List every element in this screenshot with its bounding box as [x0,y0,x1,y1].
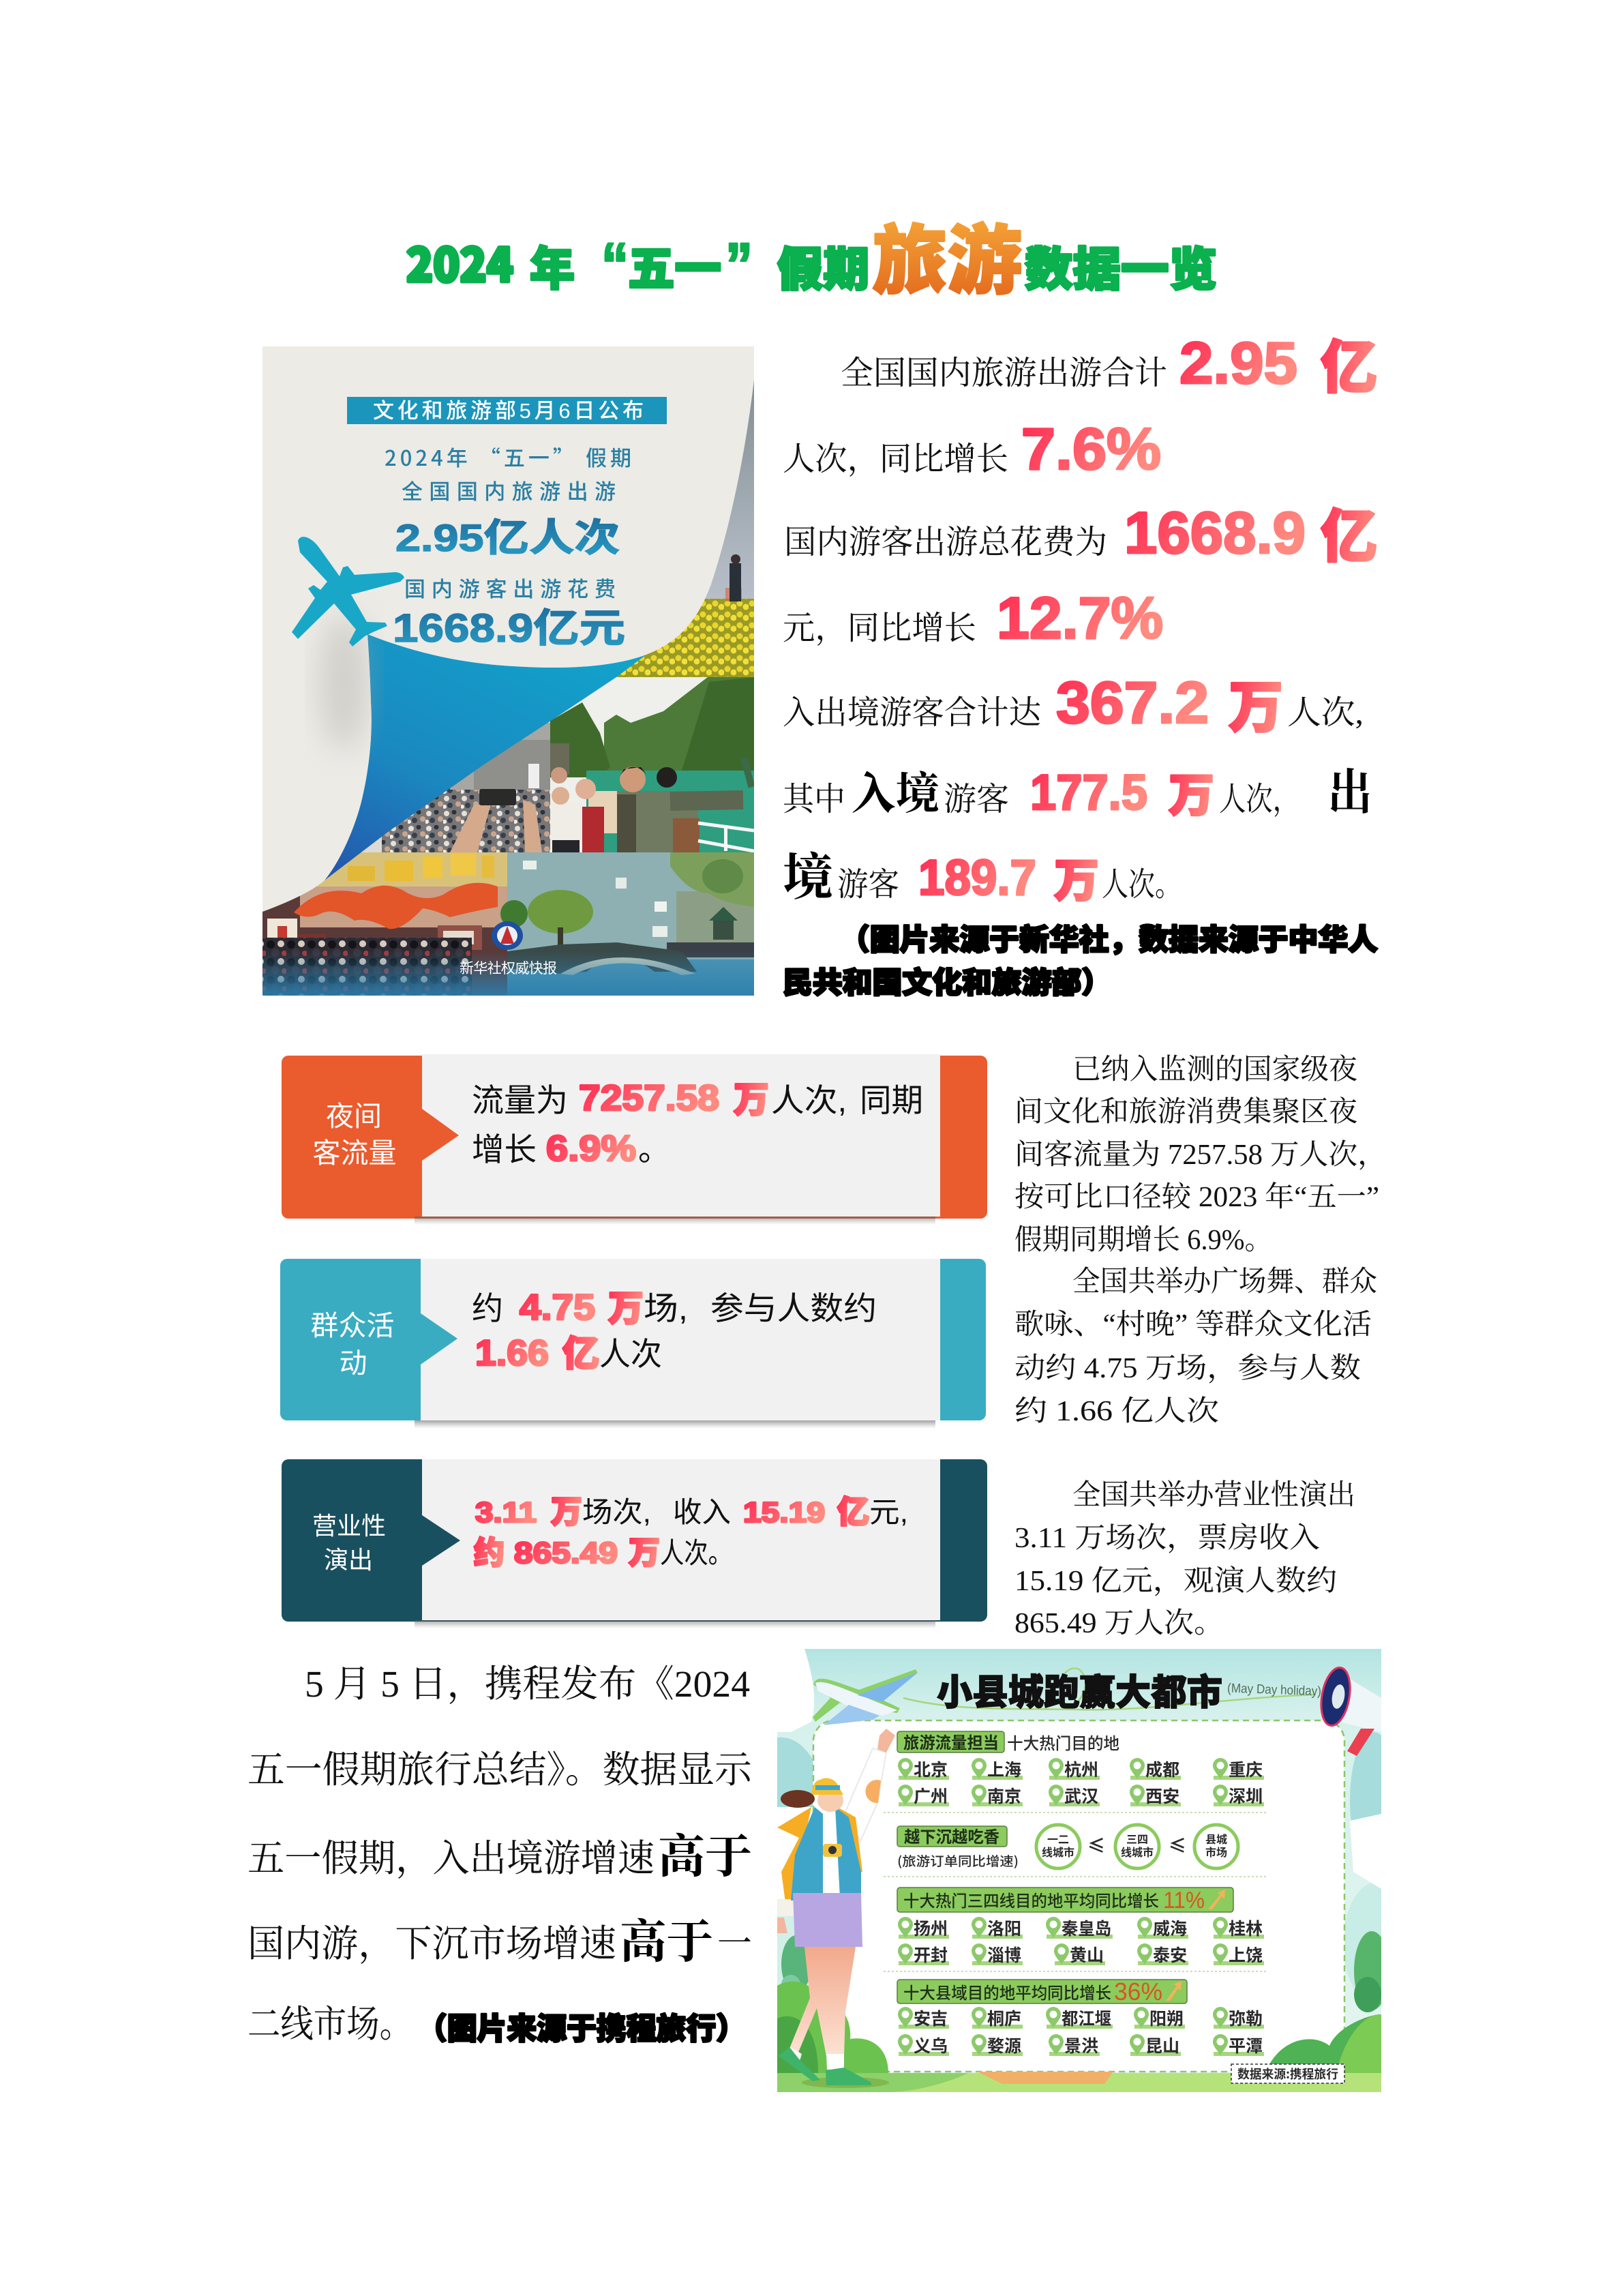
source note: Xinhua and ministry [783,916,1378,1002]
text block: national tourism figures: 1668.9 [1124,501,1306,566]
text block: night consumption note: 间客流量为 7257.58 万人次， [1014,1139,1387,1171]
card: commercial performances: 15.19 [743,1496,825,1528]
list: tier 3-4 cities: 威海 [1153,1915,1187,1940]
text block: mass events note: 动约 4.75 万场，参与人数 [1014,1353,1361,1384]
list: tier 3-4 cities: 开封 [914,1942,948,1967]
poster headline: 国内游客出游花费 [404,572,616,603]
comparison circles: 县城 [1205,1830,1227,1847]
poster headline: 1668.9亿元 [393,606,625,651]
icon: megaphone [1317,1665,1381,1756]
poster headline [385,441,631,651]
comparison circles: 线城市 [1121,1843,1154,1860]
text block: national tourism figures: 人次， [1219,781,1299,818]
card: commercial performances [282,1459,987,1628]
poster headline: 全国国内旅游出游 [402,475,616,505]
card: mass cultural events: 人次 [599,1336,662,1372]
ribbon swoosh [903,1669,1316,1710]
card: night visitor flow: 夜间 [326,1101,382,1132]
side blobs [777,1732,1411,2012]
comparison circles: 三四 [1126,1830,1148,1847]
list: ten hot cities: 重庆 [1229,1757,1263,1781]
text block: national tourism figures: 出 [1327,766,1372,820]
card: commercial performances: 场次, [582,1496,651,1528]
text block: national tourism figures: 游客 [837,867,899,903]
list: ten hot cities: 北京 [914,1757,948,1781]
text block: night consumption note: 已纳入监测的国家级夜 [1072,1054,1357,1086]
title: “ [601,231,629,299]
list: county cities: 婺源 [987,2033,1021,2057]
text block: national tourism figures: 367.2 [1056,670,1209,736]
tag: top destinations: 十大热门目的地 [1007,1730,1119,1754]
text block: performances note [1014,1479,1355,1639]
text block: national tourism figures: 人次, [1287,695,1364,731]
tag: lower-tier growth: (旅游订单同比增速) [897,1851,1019,1870]
text block: night consumption note: 按可比口径较 2023 年“五一” [1014,1181,1379,1213]
list: tier 3-4 cities: 黄山 [1070,1942,1104,1967]
logo seal [492,921,523,950]
text block: national tourism figures: 万 [1229,662,1283,743]
poster headline: 2.95亿人次 [395,516,620,559]
list: tier 3-4 cities: 桂林 [1229,1915,1263,1940]
icon: airplane [292,537,404,646]
source note: Xinhua and ministry: （图片来源于新华社，数据来源于中华人 [840,916,1378,959]
card: commercial performances: 万 [551,1487,582,1532]
photo: lantern street [262,852,507,996]
bottom blue fade [262,951,754,996]
list: ten hot cities: 武汉 [1064,1783,1098,1808]
card: commercial performances: 3.11 [475,1496,537,1528]
text block: Ctrip summary: 一 [717,1923,752,1965]
card: mass cultural events: 参与人数约 [710,1290,877,1326]
paper shadow [320,614,369,750]
tag: tier 3-4 growth: 十大热门三四线目的地平均同比增长 [903,1888,1159,1911]
comparison circles: ≤ [1087,1832,1105,1858]
list: county cities: 阳朔 [1149,2006,1184,2030]
card: mass cultural events: 场, [644,1290,688,1326]
source stamp: 数据来源:携程旅行 [1237,2065,1338,2083]
tag: top destinations [897,1729,1119,1754]
title: 数据一览 [1025,232,1217,299]
text block: performances note: 全国共举办营业性演出 [1072,1479,1355,1511]
text block: national tourism figures: 元，同比增长 [783,610,976,646]
card: night visitor flow: 万 [734,1071,769,1122]
card: commercial performances: 演出 [324,1546,373,1574]
title: ” [725,231,753,299]
text block: Ctrip summary: 5 月 5 日，携程发布《2024 [305,1663,750,1705]
photo: gorge selfie [550,677,755,852]
title: 旅游 [873,200,1022,309]
card: mass cultural events: 约 [472,1290,503,1326]
list: ten hot cities: 深圳 [1229,1783,1263,1808]
text block: performances note: 15.19 亿元，观演人数约 [1014,1565,1337,1597]
text block: national tourism figures: 7.6% [1021,417,1161,482]
text block: night consumption note: 假期同期增长 6.9%。 [1014,1225,1272,1256]
list: tier 3-4 cities: 扬州 [914,1915,948,1940]
title: 五一 [628,231,721,299]
text block: national tourism figures: 177.5 [1030,765,1147,820]
card: night visitor flow: 6.9% [546,1129,636,1169]
list: county cities: 义乌 [914,2033,948,2057]
list: ten hot cities: 西安 [1145,1783,1179,1808]
ground [777,2072,1381,2092]
card: commercial performances: 人次。 [660,1537,732,1569]
photo: lake and bridge [500,852,754,996]
card: mass cultural events: 群众活 [311,1310,394,1341]
list: county cities: 昆山 [1145,2033,1179,2057]
tag: county growth: 36% [1114,1978,1162,2006]
text block: Ctrip summary [247,1663,753,2048]
card: commercial performances: 约 [474,1528,505,1573]
card: commercial performances: 收入 [673,1496,731,1528]
right trees [1265,1931,1389,2073]
card: mass cultural events: 动 [340,1347,367,1379]
text block: national tourism figures: 2.95 [1179,331,1297,396]
text block: national tourism figures: 亿 [1321,491,1377,573]
cloud top-left [777,1649,814,1732]
blue page fold [325,634,646,880]
text block: performances note: 865.49 万人次。 [1014,1608,1224,1639]
subheading: (May Day holiday) [1227,1682,1321,1699]
text block: Ctrip summary: 二线市场。 [247,2003,412,2045]
date banner: 文化和旅游部5月6日公布 [373,399,644,423]
text block: Ctrip summary: 高于 [620,1916,713,1968]
text block: mass events note: 歌咏、“村晚” 等群众文化活 [1014,1309,1372,1341]
list: ten hot cities: 南京 [987,1783,1021,1808]
heading: 小县城跑赢大都市 [937,1664,1222,1716]
card: mass cultural events: 万 [608,1280,644,1331]
text block: Ctrip summary: 高于 [658,1831,752,1883]
poster headline: 2024年 “五一” 假期 [385,441,631,472]
text block: mass events note: 约 1.66 亿人次 [1014,1396,1219,1427]
list: tier 3-4 cities: 淄博 [987,1942,1021,1967]
text block: national tourism figures: 其中 [783,781,845,818]
title: 假期 [777,232,869,299]
text block: national tourism figures: 入境 [852,770,939,819]
list: county cities: 都江堰 [1062,2006,1111,2030]
card: commercial performances: 营业性 [312,1512,386,1540]
text block: national tourism figures [783,322,1377,910]
list: county cities: 景洪 [1064,2033,1098,2057]
infographic page [249,221,1381,2092]
title [406,200,1217,309]
list: ten hot cities: 成都 [1145,1757,1179,1781]
list: county cities: 弥勒 [1229,2006,1263,2030]
panel: Xinhua poster image [262,346,755,996]
text block: Ctrip summary: 国内游，下沉市场增速 [247,1923,616,1965]
left trees [777,1935,888,2073]
text block: performances note: 3.11 万场次，票房收入 [1014,1522,1320,1554]
text block: national tourism figures: 人次，同比增长 [783,441,1008,477]
comparison circles [1036,1825,1238,1868]
text block: mass events note [1014,1266,1377,1427]
title: 年 [530,231,575,299]
text block: national tourism figures: 全国国内旅游出游合计 [841,355,1167,391]
card: night visitor flow: 。 [638,1131,670,1167]
card: night visitor flow: 流量为 [472,1082,568,1118]
list: county cities: 桐庐 [987,2006,1021,2030]
text block: national tourism figures: 亿 [1321,322,1377,404]
card: commercial performances: 865.49 [514,1536,618,1570]
white dashed panel [813,1720,1344,2072]
comparison circles: 一二 [1047,1830,1069,1847]
list: ten hot cities: 上海 [987,1757,1021,1781]
comparison circles: ≤ [1169,1832,1186,1858]
photo: curl shadow and rapeseed field [617,368,754,678]
text block: mass events note: 全国共举办广场舞、群众 [1072,1266,1377,1298]
source note: Xinhua and ministry: 民共和国文化和旅游部） [783,959,1111,1002]
photo: crowd at ruins [382,723,550,852]
list: county cities [898,2006,1264,2057]
card: night visitor flow: 增长 [472,1131,537,1167]
text block: national tourism figures: 游客 [944,781,1009,818]
character: traveller [777,1729,895,2088]
comparison circles: 市场 [1205,1843,1227,1860]
icon: plane [813,1669,918,1725]
list: county cities: 平潭 [1229,2033,1263,2057]
agency credit: 新华社权威快报 [460,961,557,976]
tag: county growth: 十大县域目的地平均同比增长 [903,1980,1111,2003]
text block: Ctrip summary: 五一假期旅行总结》。数据显示 [247,1749,753,1791]
list: tier 3-4 cities: 泰安 [1153,1942,1187,1967]
panel: Ctrip poster [777,1649,1411,2092]
card: night visitor flow [282,1054,987,1225]
list: tier 3-4 cities: 上饶 [1229,1942,1263,1967]
card: mass cultural events: 1.66 [475,1333,549,1373]
list: ten hot cities [898,1757,1264,1808]
paper sheet [262,346,754,912]
comparison circles: 线城市 [1042,1843,1074,1860]
tag: lower-tier growth [897,1823,1019,1870]
text block: national tourism figures: 人次。 [1102,867,1182,903]
text block: national tourism figures: 国内游客出游总花费为 [784,524,1107,561]
title: 2024 [406,228,513,295]
text block: national tourism figures: 189.7 [918,850,1036,906]
list: tier 3-4 cities: 秦皇岛 [1062,1915,1111,1940]
card: night visitor flow: 7257.58 [579,1078,719,1118]
list: ten hot cities: 杭州 [1064,1757,1098,1781]
tag: tier 3-4 growth: 11% [1163,1888,1205,1913]
text block: national tourism figures: 入出境游客合计达 [783,695,1041,731]
list: ten hot cities: 广州 [914,1783,948,1808]
tag: county growth [897,1978,1187,2006]
text block: night consumption note [1014,1054,1387,1256]
list: tier 3-4 cities [898,1915,1264,1967]
tag: top destinations: 旅游流量担当 [903,1729,999,1753]
card: commercial performances: 亿 [837,1487,869,1532]
text block: national tourism figures: 万 [1054,844,1099,910]
card: night visitor flow: 人次, [771,1082,847,1118]
card: commercial performances: 元, [869,1496,908,1528]
list: tier 3-4 cities: 洛阳 [987,1915,1021,1940]
card: mass cultural events [280,1259,986,1429]
text block: Ctrip summary: 五一假期，入出境游增速 [247,1838,655,1879]
card: night visitor flow: 同期 [860,1082,923,1118]
card: commercial performances: 万 [629,1528,660,1573]
text block: national tourism figures: 境 [783,850,833,906]
text block: national tourism figures: 万 [1169,759,1214,825]
card: mass cultural events: 亿 [562,1325,599,1376]
text block: national tourism figures: 12.7% [997,586,1163,651]
list: county cities: 安吉 [914,2006,948,2030]
card: night visitor flow: 客流量 [312,1137,397,1169]
text block: night consumption note: 间文化和旅游消费集聚区夜 [1014,1096,1357,1128]
text block: Ctrip summary: （图片来源于携程旅行） [417,2004,746,2048]
card: mass cultural events: 4.75 [520,1287,595,1328]
tag: lower-tier growth: 越下沉越吃香 [904,1823,999,1847]
